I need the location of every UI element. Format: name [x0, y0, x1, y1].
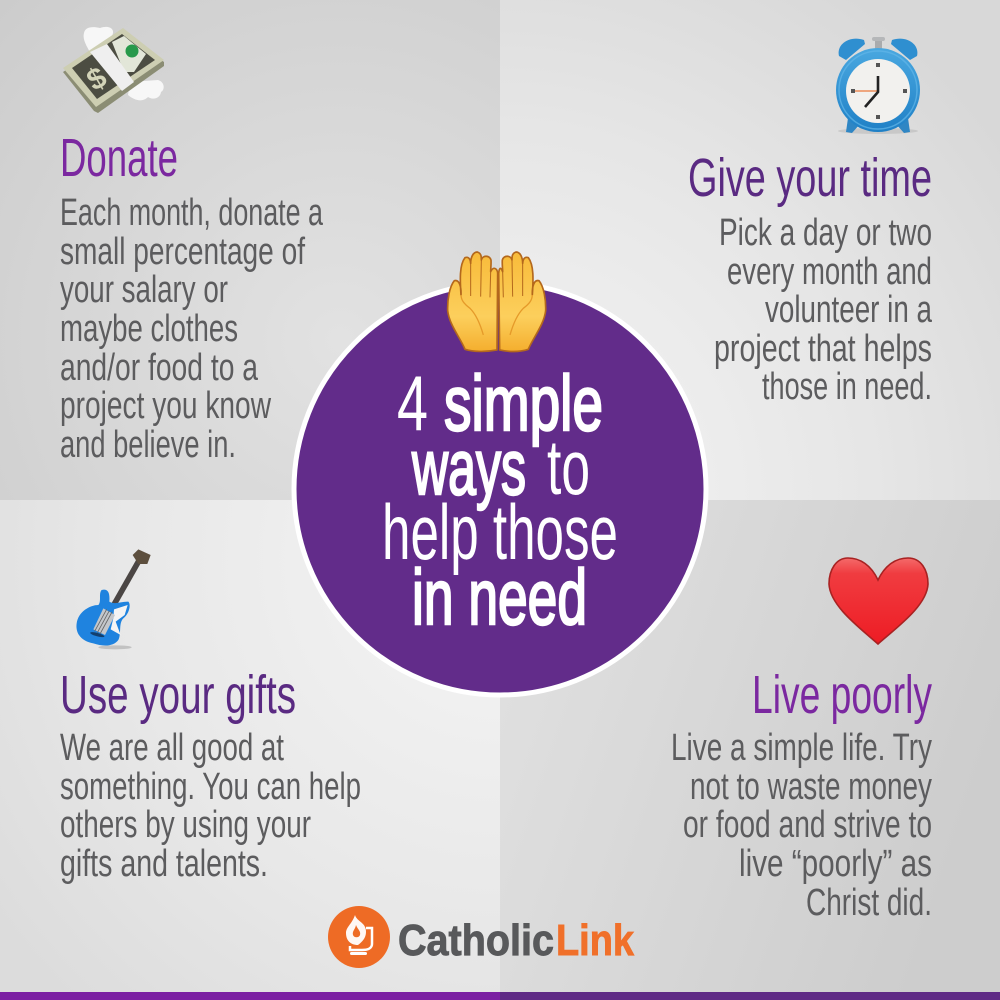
title: to: [547, 423, 590, 511]
logo: CatholicLink: Catholic: [398, 916, 554, 965]
text: Donate body: small percentage of: [60, 231, 305, 273]
text: Donate body: [60, 192, 324, 466]
text: Give your time body: [714, 212, 933, 408]
text: Donate body: project you know: [60, 385, 271, 427]
icon: red heart: [829, 558, 928, 644]
icon: money with wings: $: [81, 61, 113, 98]
icon: open hands: [448, 252, 546, 351]
text: Give your time body: volunteer in a: [765, 289, 933, 331]
title: ways: [411, 423, 526, 511]
text: Live poorly body: [671, 727, 932, 924]
text: Use your gifts body: We are all good at: [60, 727, 284, 769]
logo: CatholicLink: [328, 906, 634, 968]
text: Live poorly body: Christ did.: [806, 882, 932, 924]
text: Donate body: your salary or: [60, 269, 228, 311]
title: 4: [397, 359, 428, 447]
title: [382, 359, 618, 641]
heading: Donate: Donate: [60, 128, 178, 188]
bottom bar: [0, 992, 1000, 1000]
icon: alarm clock: [836, 37, 920, 134]
title: help those: [382, 488, 618, 576]
text: Donate body: maybe clothes: [60, 308, 238, 350]
center circle: [294, 283, 706, 695]
icon: money with wings: [63, 27, 164, 113]
text: Use your gifts body: others by using your: [60, 804, 311, 846]
text: Donate body: and believe in.: [60, 424, 236, 466]
text: Donate body: Each month, donate a: [60, 192, 324, 234]
text: Live poorly body: live “poorly” as: [739, 843, 932, 885]
text: Give your time body: project that helps: [714, 328, 932, 370]
icon: guitar: [76, 549, 151, 649]
text: Give your time body: those in need.: [762, 366, 932, 408]
text: Give your time body: Pick a day or two: [719, 212, 932, 254]
title: simple: [444, 359, 603, 447]
text: Donate body: and/or food to a: [60, 347, 259, 389]
text: Use your gifts body: something. You can help: [60, 766, 361, 808]
text: Use your gifts body: [60, 727, 361, 885]
text: Use your gifts body: gifts and talents.: [60, 843, 268, 885]
heading: Use your gifts: Use your gifts: [60, 665, 296, 725]
title: in need: [412, 553, 587, 641]
logo: CatholicLink: Link: [556, 916, 634, 965]
